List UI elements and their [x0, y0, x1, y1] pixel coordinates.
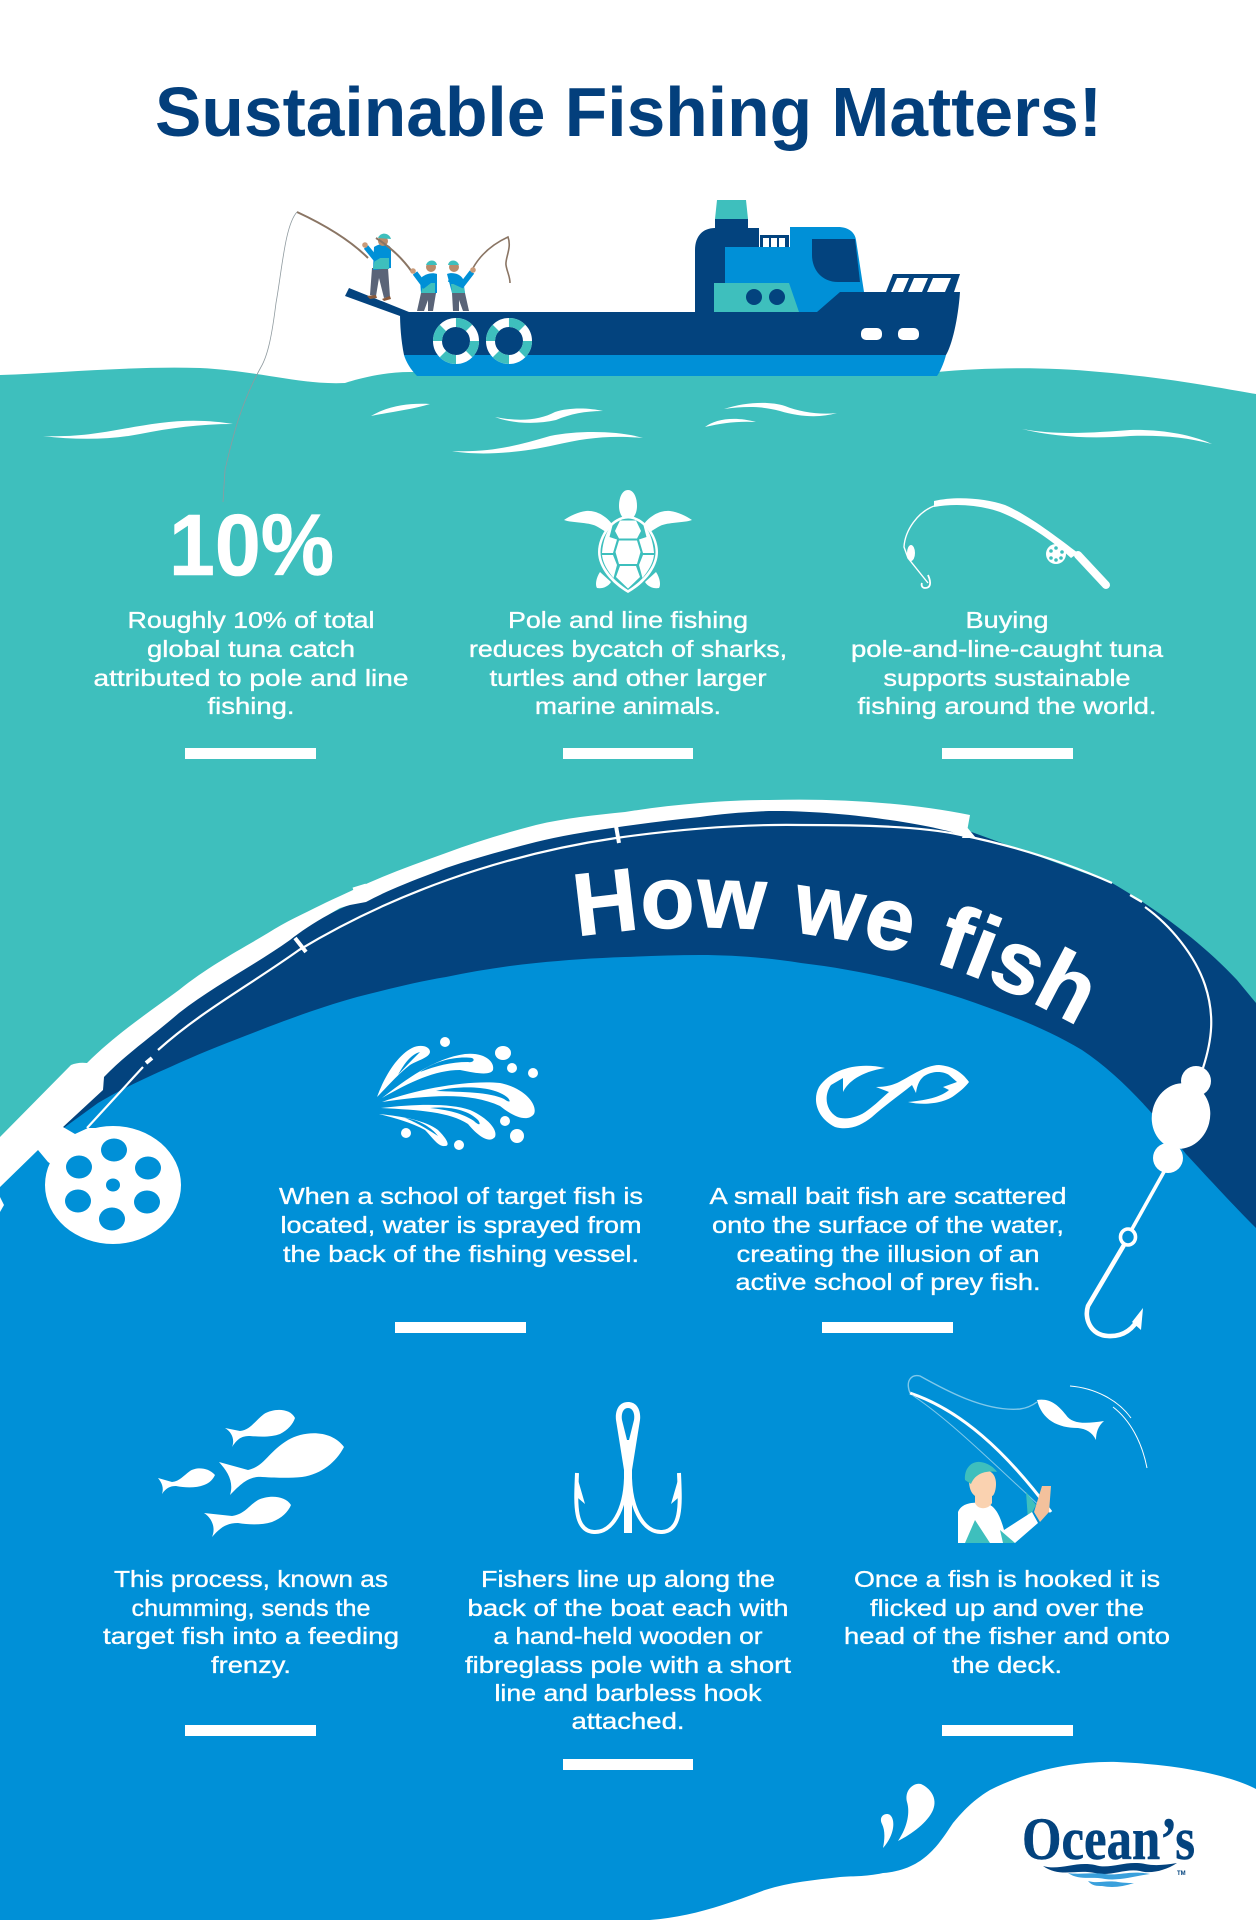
bar — [563, 748, 693, 759]
life rings — [438, 322, 528, 360]
text: This process, known as — [114, 1566, 388, 1592]
text — [851, 607, 1163, 719]
text: the back of the fishing vessel. — [283, 1241, 639, 1267]
rod body — [0, 800, 970, 1187]
text: fishing around the world. — [858, 693, 1156, 719]
icon: fisher with fish — [908, 1376, 1147, 1543]
float and hook — [1087, 1066, 1218, 1336]
text — [103, 1566, 399, 1678]
text: When a school of target fish is — [279, 1183, 643, 1209]
text: active school of prey fish. — [736, 1269, 1040, 1295]
bar — [185, 1725, 316, 1736]
text — [469, 607, 787, 719]
text: frenzy. — [211, 1652, 291, 1678]
fisher 1 — [297, 212, 391, 301]
icon: turtle — [564, 490, 692, 593]
text — [279, 1183, 643, 1267]
text: chumming, sends the — [132, 1595, 370, 1621]
bar — [395, 1322, 526, 1333]
step: line up — [465, 1402, 792, 1770]
text: line and barbless hook — [494, 1680, 762, 1706]
text: supports sustainable — [884, 665, 1130, 691]
icon: water splash — [377, 1037, 538, 1150]
title: Sustainable Fishing Matters! — [155, 73, 1102, 151]
icon: treble hook — [576, 1402, 680, 1533]
cabin — [695, 227, 864, 312]
text: fibreglass pole with a short — [465, 1652, 792, 1678]
hull — [400, 292, 960, 376]
fisher 3 — [447, 237, 510, 311]
boom — [345, 288, 409, 316]
text: Fishers line up along the — [481, 1566, 775, 1592]
funnel — [715, 200, 748, 228]
bar — [563, 1759, 693, 1770]
fishing boat — [345, 200, 960, 376]
text: A small bait fish are scattered — [710, 1183, 1066, 1209]
step: flick — [844, 1376, 1170, 1736]
fact: rod — [851, 498, 1163, 759]
text: global tuna catch — [147, 636, 355, 662]
bar — [942, 748, 1073, 759]
text: Once a fish is hooked it is — [854, 1566, 1160, 1592]
text: onto the surface of the water, — [712, 1212, 1064, 1238]
text: fishing. — [208, 693, 294, 719]
fact: turtle — [469, 490, 787, 759]
heading: how we fish: How we fish — [575, 868, 1090, 1024]
fishers with rods — [223, 212, 510, 502]
guide line — [87, 825, 1211, 1128]
icon: school of fish — [158, 1410, 344, 1537]
text: attributed to pole and line — [94, 665, 408, 691]
text: pole-and-line-caught tuna — [851, 636, 1163, 662]
text — [465, 1566, 792, 1734]
icon: water droplets — [881, 1784, 935, 1848]
text: flicked up and over the — [870, 1595, 1144, 1621]
text: attached. — [572, 1708, 684, 1734]
text: Pole and line fishing — [508, 607, 748, 633]
reel — [45, 1126, 181, 1244]
text: Buying — [966, 607, 1048, 633]
text — [844, 1566, 1170, 1678]
logo: Ocean's: Ocean’s — [1022, 1806, 1195, 1872]
text: back of the boat each with — [468, 1595, 788, 1621]
long fishing line — [223, 212, 297, 502]
text — [710, 1183, 1066, 1295]
teal sea background — [0, 368, 1256, 1300]
icon: fishing rod — [904, 498, 1106, 588]
waves on sea surface — [43, 403, 1212, 453]
text: the deck. — [952, 1652, 1062, 1678]
blue water background — [0, 955, 1256, 1920]
step: bait fish — [710, 1065, 1066, 1333]
bar — [822, 1322, 953, 1333]
panel: how we fish steps — [103, 1037, 1170, 1770]
text: turtles and other larger — [490, 665, 767, 691]
fisher 2 — [376, 238, 437, 311]
bar — [942, 1725, 1073, 1736]
text: creating the illusion of an — [736, 1241, 1040, 1267]
bar — [185, 748, 316, 759]
icon: hook with fish — [816, 1065, 969, 1128]
panel: facts — [94, 490, 1163, 759]
fishing rod and reel — [0, 800, 1211, 1244]
step: water spray — [279, 1037, 643, 1333]
stat 10%: 10% — [169, 497, 334, 594]
text: located, water is sprayed from — [280, 1212, 642, 1238]
text: marine animals. — [535, 693, 721, 719]
text: head of the fisher and onto — [844, 1623, 1170, 1649]
text — [94, 607, 408, 719]
bow railing — [886, 274, 960, 292]
fact: 10 percent — [94, 497, 408, 759]
text: Roughly 10% of total — [128, 607, 374, 633]
text: a hand-held wooden or — [494, 1623, 763, 1649]
text: target fish into a feeding — [103, 1623, 399, 1649]
navy arc band — [63, 808, 1256, 1400]
text: reduces bycatch of sharks, — [469, 636, 787, 662]
step: chumming — [103, 1410, 399, 1736]
logo: Ocean's: TM — [1177, 1871, 1186, 1877]
